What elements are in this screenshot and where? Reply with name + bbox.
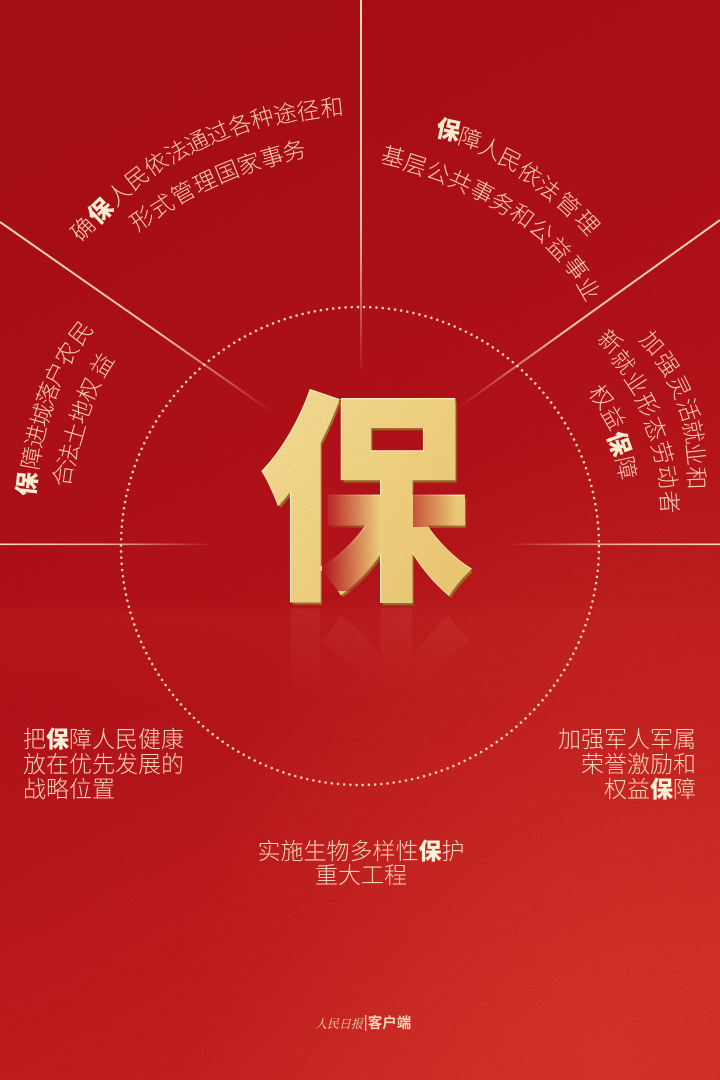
text: top-right sector: 障	[455, 123, 485, 155]
text: left sector: 地	[65, 397, 97, 427]
text: lower left: 放在优先发展的	[23, 751, 184, 777]
text: top-right sector: 理	[570, 206, 604, 240]
text: top-left sector: 人	[102, 177, 136, 211]
text: left sector: 落	[32, 379, 64, 409]
text: top-left sector: 国	[211, 156, 243, 188]
text: lower right: 荣誉激励和	[581, 751, 696, 777]
text: bottom centre: 重大工程	[315, 862, 407, 888]
text: top-left sector: 务	[280, 136, 308, 166]
text: top-right sector: 公	[524, 214, 558, 248]
text: top-left sector: 依	[139, 147, 173, 181]
text: bottom centre: 实施生物多样性保护	[258, 838, 464, 864]
text: lower right	[558, 726, 696, 802]
text: right sector: 业	[681, 441, 709, 467]
text: right sector: 障	[611, 454, 641, 482]
text: lower right: 加强军人军属	[558, 726, 696, 752]
text: top-right sector: 共	[444, 165, 476, 199]
text: top-left sector: 管	[167, 176, 199, 210]
text: left sector: 土	[59, 419, 91, 449]
text: right sector: 强	[650, 347, 684, 381]
text: top-right sector: 依	[513, 157, 547, 191]
text: left sector: 保	[13, 471, 43, 497]
text: top-right sector: 益	[542, 232, 576, 266]
text: right sector: 保	[601, 428, 635, 460]
text: right sector: 态	[639, 413, 671, 445]
text: left sector	[13, 316, 119, 497]
text: top-right sector: 人	[474, 133, 506, 165]
text: top-right sector: 和	[505, 199, 539, 233]
radial divider lines	[0, 0, 720, 545]
main gold character: 保	[261, 382, 473, 632]
text: right sector: 形	[630, 389, 664, 421]
text: right sector: 新	[593, 325, 627, 359]
text: left sector: 城	[26, 400, 58, 430]
text: top-left sector: 各	[225, 109, 255, 141]
text: top-right sector: 务	[485, 187, 519, 221]
text: left sector: 合	[49, 462, 77, 488]
text: left sector: 益	[85, 348, 119, 382]
text: top-left sector: 理	[189, 165, 221, 199]
text: top-right sector: 层	[400, 149, 430, 181]
text: left sector: 法	[54, 441, 84, 469]
text: top-left sector: 过	[202, 116, 234, 150]
text: top-left sector: 确	[66, 212, 100, 246]
text: top-left sector: 径	[295, 96, 321, 126]
dotted circle	[121, 307, 599, 785]
text: left sector: 民	[64, 316, 98, 350]
text: left sector: 户	[39, 358, 73, 390]
text: top-left sector: 形	[125, 202, 159, 236]
text: top-right sector: 法	[531, 172, 565, 206]
text: right sector: 加	[635, 326, 669, 360]
text: top-right sector: 管	[551, 188, 585, 222]
text: top-right sector: 业	[571, 273, 605, 305]
text: right sector	[584, 325, 709, 514]
logo: 客户端	[368, 1014, 411, 1032]
text: bottom centre	[258, 838, 464, 888]
text: right sector: 权	[584, 380, 618, 414]
text: top-right sector	[379, 115, 605, 305]
main gold character: 保	[259, 379, 471, 629]
text: top-right sector: 基	[379, 142, 407, 172]
text: top-right sector: 民	[494, 143, 526, 177]
text: lower right: 权益保障	[604, 776, 696, 802]
text: top-right sector: 事	[466, 175, 498, 209]
text: top-left sector: 事	[257, 141, 287, 173]
logo	[315, 1014, 411, 1032]
text: right sector: 灵	[662, 371, 696, 403]
text: right sector: 就	[678, 418, 708, 446]
text: top-left sector: 式	[145, 189, 179, 223]
text: top-left sector: 法	[160, 135, 194, 169]
text: top-left sector: 通	[181, 125, 213, 159]
logo: 人民日报	[315, 1015, 364, 1032]
text: right sector: 和	[683, 466, 709, 490]
text: lower left: 战略位置	[23, 776, 115, 802]
text: left sector: 进	[21, 422, 51, 450]
text: right sector: 者	[655, 490, 683, 514]
text: right sector: 就	[606, 345, 640, 379]
text: top-right sector: 保	[433, 115, 463, 147]
text: lower left: 把保障人民健康	[23, 726, 184, 752]
text: top-right sector: 公	[422, 157, 454, 189]
text: left sector: 农	[50, 337, 84, 371]
main gold character reflection: 保	[259, 564, 471, 889]
text: left sector: 障	[17, 444, 47, 472]
main gold character: 保	[259, 379, 472, 630]
text: top-left sector: 种	[247, 102, 277, 134]
text: top-left sector: 家	[234, 148, 264, 180]
text: top-left sector: 保	[83, 194, 119, 230]
text: right sector: 益	[596, 402, 630, 434]
text: right sector: 活	[672, 395, 704, 425]
text: lower left	[23, 726, 184, 802]
text: top-left sector: 民	[120, 161, 154, 195]
text: right sector: 业	[619, 366, 653, 400]
text: top-left sector	[66, 94, 345, 246]
text: top-left sector: 途	[271, 99, 299, 129]
text: top-right sector: 事	[559, 251, 593, 285]
text: right sector: 动	[652, 463, 682, 491]
text: right sector: 劳	[646, 438, 678, 468]
text: top-left sector: 和	[319, 94, 345, 122]
text: left sector: 权	[72, 374, 106, 406]
